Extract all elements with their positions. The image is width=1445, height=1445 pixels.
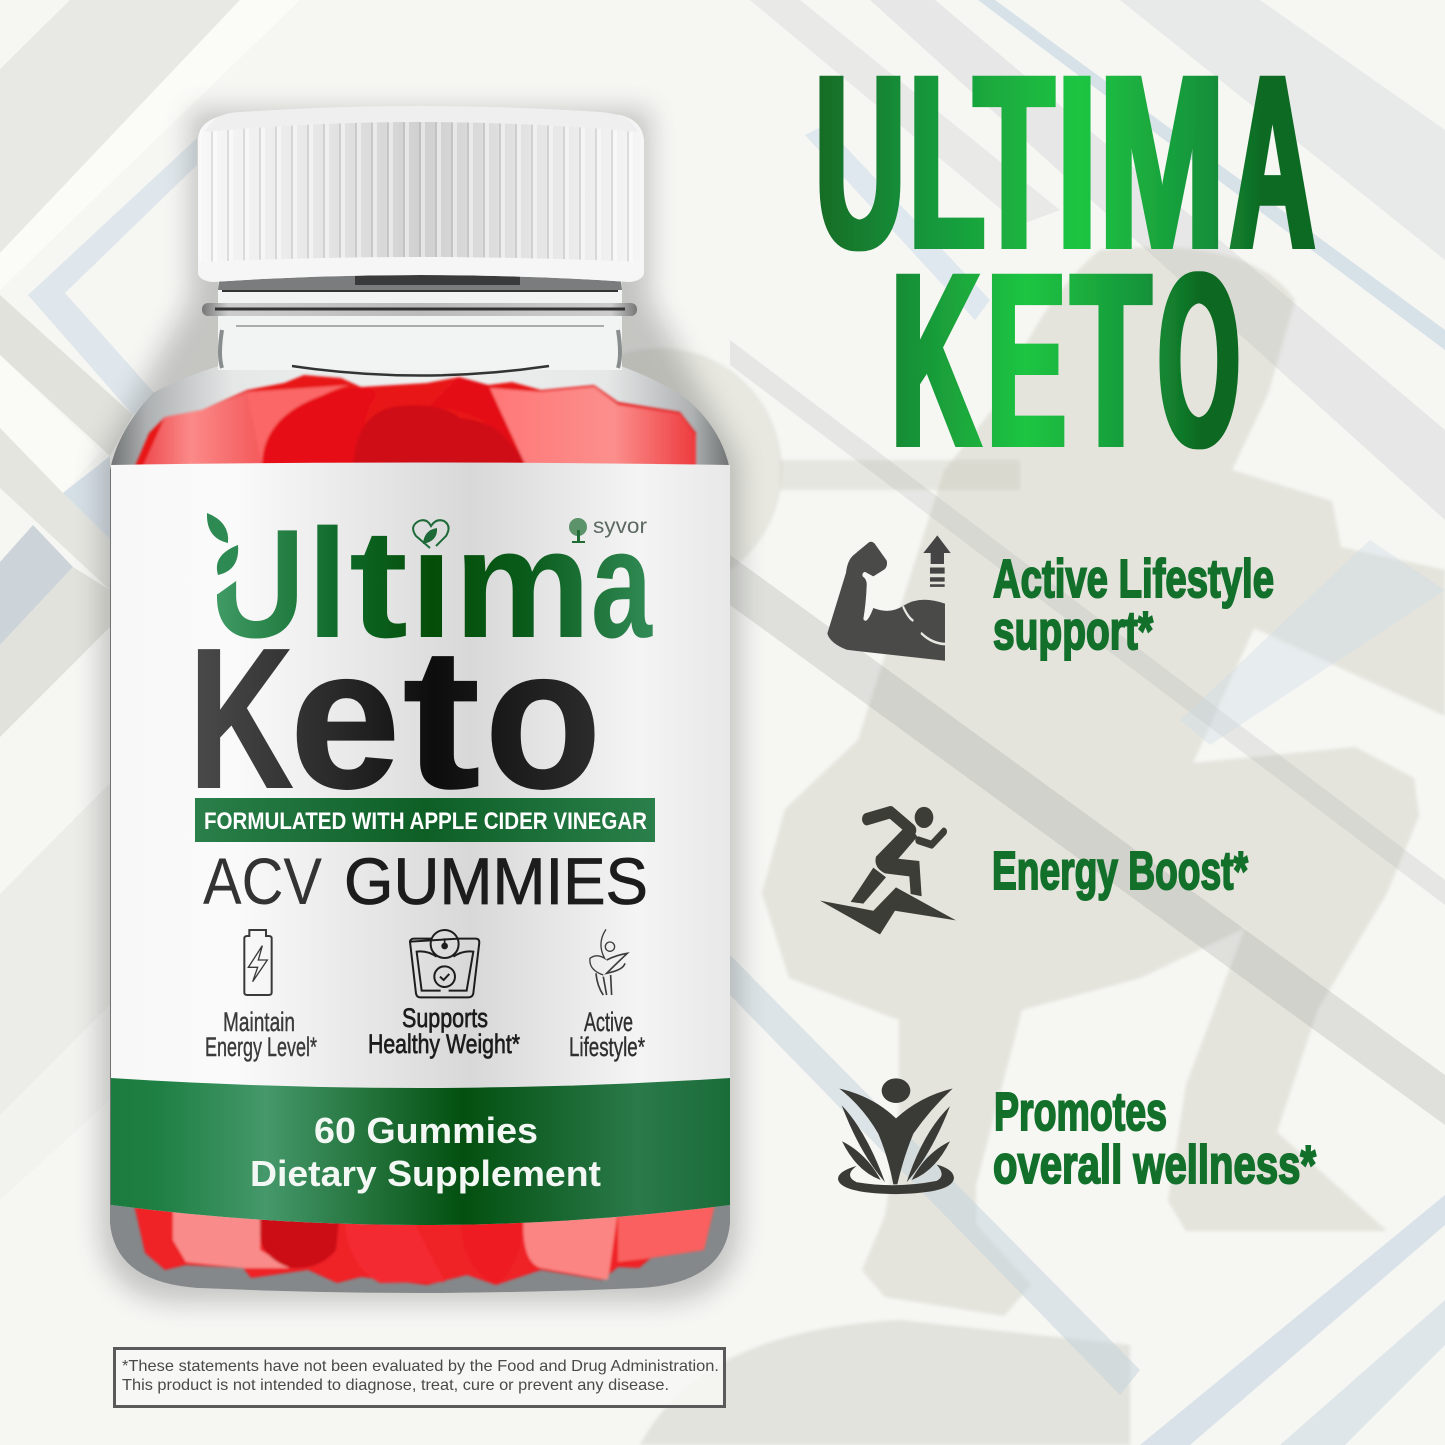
label: maintain energy level	[205, 1007, 317, 1062]
logo: syvor	[569, 515, 647, 543]
band text: 60 gummies dietary supplement: 60 Gummies	[314, 1110, 538, 1151]
title: Ultima Keto: O	[1158, 223, 1240, 498]
label: active lifestyle	[569, 1007, 645, 1062]
title: Ultima Keto: L	[909, 25, 985, 300]
icon: heart with leaf	[413, 520, 449, 548]
bottom glass edge	[110, 1205, 730, 1293]
background: faded squatting athlete	[538, 247, 1445, 1445]
icon: running figure	[820, 807, 956, 934]
text: active lifestyle support: Active Lifestyle	[993, 549, 1274, 609]
background: diagonal light bands	[730, 340, 1445, 1445]
brand: Ultima: i	[410, 497, 453, 670]
title: Ultima Keto: T	[974, 25, 1054, 300]
title: Ultima Keto: T	[1071, 223, 1151, 498]
text: promotes overall wellness: overall wellness*	[993, 1135, 1316, 1195]
title: ACV gummies	[203, 844, 648, 918]
text: A	[1230, 25, 1315, 300]
banner: formulated with apple cider vinegar	[195, 798, 655, 842]
bottle label	[111, 462, 730, 1225]
label: supports healthy weight: Healthy Weight*	[368, 1029, 520, 1059]
product bottle	[100, 106, 740, 1302]
brand: Keto: t	[403, 608, 480, 830]
title: ACV gummies: ACV	[203, 844, 322, 918]
icon: flexed arm with up arrow	[827, 535, 951, 661]
title: ACV gummies: GUMMIES	[344, 844, 648, 918]
label: maintain energy level: Energy Level*	[205, 1032, 317, 1062]
disclaimer box	[114, 1348, 724, 1406]
icon: battery	[244, 930, 272, 995]
title: Ultima Keto	[815, 25, 1315, 498]
icon: weighing scale	[410, 930, 479, 997]
brand: Ultima: a	[591, 497, 653, 670]
text: promotes overall wellness	[993, 1082, 1316, 1195]
green label band	[111, 1078, 730, 1225]
text: energy boost: Energy Boost*	[992, 841, 1248, 901]
bottle shadow	[100, 110, 740, 1302]
icon: active figure	[590, 929, 627, 995]
label: supports healthy weight: Supports	[402, 1003, 488, 1033]
banner: formulated with apple cider vinegar: FORMULATED WITH APPLE CIDER VINEGAR	[204, 808, 647, 835]
text: active lifestyle support	[993, 549, 1274, 661]
icon: leaves on U	[207, 513, 238, 575]
disclaimer box: *These statements have not been evaluated by the Food and Drug Administration.	[122, 1358, 719, 1375]
brand: Ultima: m	[454, 497, 591, 670]
label: maintain energy level: Maintain	[223, 1007, 295, 1037]
brand: Keto: K	[189, 608, 293, 830]
bottle cap	[198, 106, 644, 282]
bottle glass body	[110, 365, 730, 1293]
title: Ultima Keto: M	[1099, 25, 1225, 300]
title: Ultima Keto: K	[891, 223, 980, 498]
band text: 60 gummies dietary supplement: Dietary Supplement	[250, 1153, 601, 1194]
brand: Keto: o	[485, 608, 601, 830]
brand: Ultima	[207, 497, 653, 670]
label: active lifestyle: Lifestyle*	[569, 1032, 645, 1062]
title: Ultima Keto: I	[1057, 25, 1097, 300]
brand: Ultima: t	[349, 497, 408, 670]
title: Ultima Keto: E	[987, 223, 1066, 498]
icon: wellness figure	[838, 1078, 954, 1194]
brand: Keto: e	[290, 608, 400, 830]
brand: Ultima: U	[209, 497, 305, 670]
top gummies	[135, 375, 696, 466]
brand: Ultima: l	[307, 497, 348, 670]
title: Ultima Keto: U	[815, 25, 905, 300]
cutouts: shortened U arm and dotless i	[208, 518, 243, 594]
text: active lifestyle support: support*	[993, 601, 1153, 661]
bottom gummies	[133, 1200, 716, 1285]
band text: 60 gummies dietary supplement	[250, 1110, 601, 1194]
logo: syvor: syvor	[593, 515, 647, 538]
label: supports healthy weight	[368, 1003, 520, 1059]
label: active lifestyle: Active	[584, 1007, 633, 1037]
bottle neck	[202, 272, 637, 376]
disclaimer box: This product is not intended to diagnose, treat, cure or prevent any disease.	[122, 1377, 669, 1394]
text: promotes overall wellness: Promotes	[994, 1082, 1167, 1142]
